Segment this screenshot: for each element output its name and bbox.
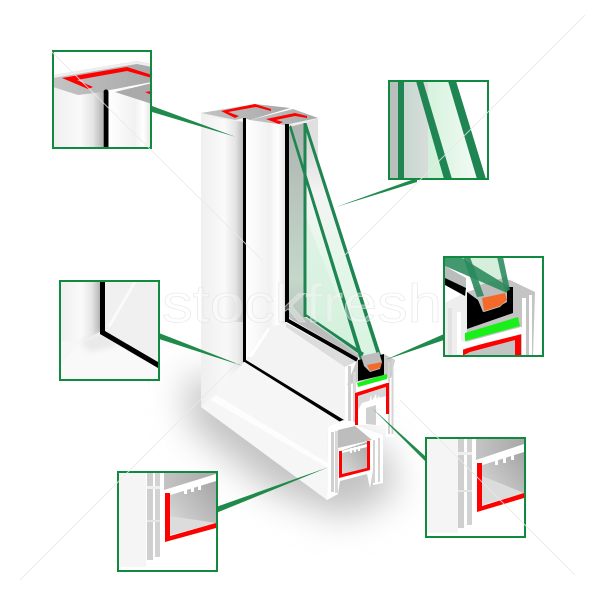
- window frame: [201, 104, 395, 500]
- outer frame bottom rail: [201, 363, 345, 500]
- outer frame column: [201, 104, 290, 407]
- watermark text: stockfresh: [162, 274, 442, 334]
- panel: glass detail: [388, 81, 488, 179]
- panel: corner joint detail: [59, 281, 159, 380]
- sash right side: [305, 118, 380, 360]
- panel: lower profile detail: [117, 471, 217, 571]
- panel: glazing bead and gasket detail: [443, 256, 543, 356]
- frame profile end: [327, 420, 383, 500]
- black gaskets: [243, 118, 358, 423]
- sash column: [245, 109, 318, 360]
- sash bottom rail: [245, 323, 357, 422]
- panel: sash profile detail: [425, 437, 525, 537]
- glass unit: [289, 123, 382, 360]
- sash profile end: [345, 352, 395, 437]
- leader lines: [152, 106, 444, 513]
- panel: frame top detail: [52, 50, 152, 149]
- drop shadow: [185, 375, 398, 518]
